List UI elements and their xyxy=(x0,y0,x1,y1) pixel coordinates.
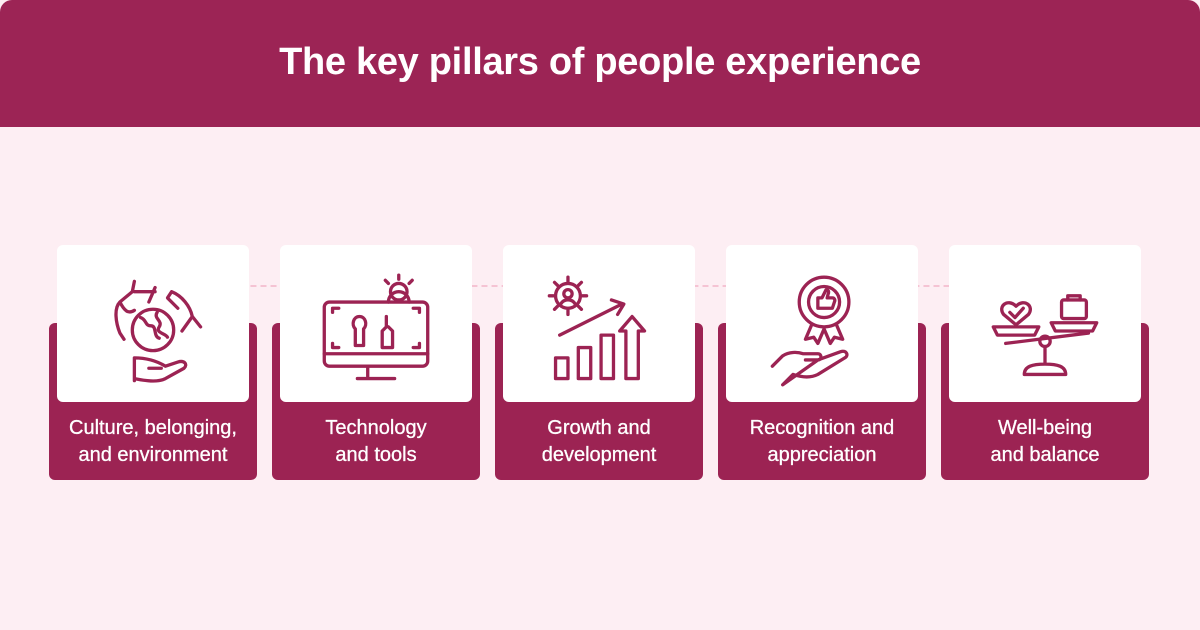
card: culture xyxy=(49,245,257,480)
label xyxy=(750,417,894,466)
label: Growth and xyxy=(547,417,651,439)
icon: balance scale xyxy=(992,294,1098,376)
label: and balance xyxy=(990,444,1099,466)
icon: award on hand xyxy=(770,276,851,386)
label: appreciation xyxy=(768,444,876,466)
card: growth xyxy=(495,245,703,480)
label: Well-being xyxy=(998,417,1092,439)
label: Culture, belonging, xyxy=(69,417,237,439)
title: The key pillars of people experience xyxy=(279,41,921,83)
label: Recognition and xyxy=(750,417,894,439)
label: and environment xyxy=(78,444,227,466)
card: recognition xyxy=(718,245,926,480)
label: development xyxy=(542,444,656,466)
icon: monitor with tools xyxy=(322,274,430,380)
card: well-being xyxy=(941,245,1149,480)
card: technology xyxy=(272,245,480,480)
label xyxy=(990,417,1099,466)
icon: hands around globe xyxy=(114,280,202,383)
icon: chart with gear xyxy=(548,276,646,380)
label: Technology xyxy=(325,417,427,439)
label: and tools xyxy=(335,444,417,466)
label xyxy=(542,417,656,466)
label xyxy=(325,417,427,466)
label xyxy=(69,417,237,466)
header xyxy=(0,0,1200,127)
